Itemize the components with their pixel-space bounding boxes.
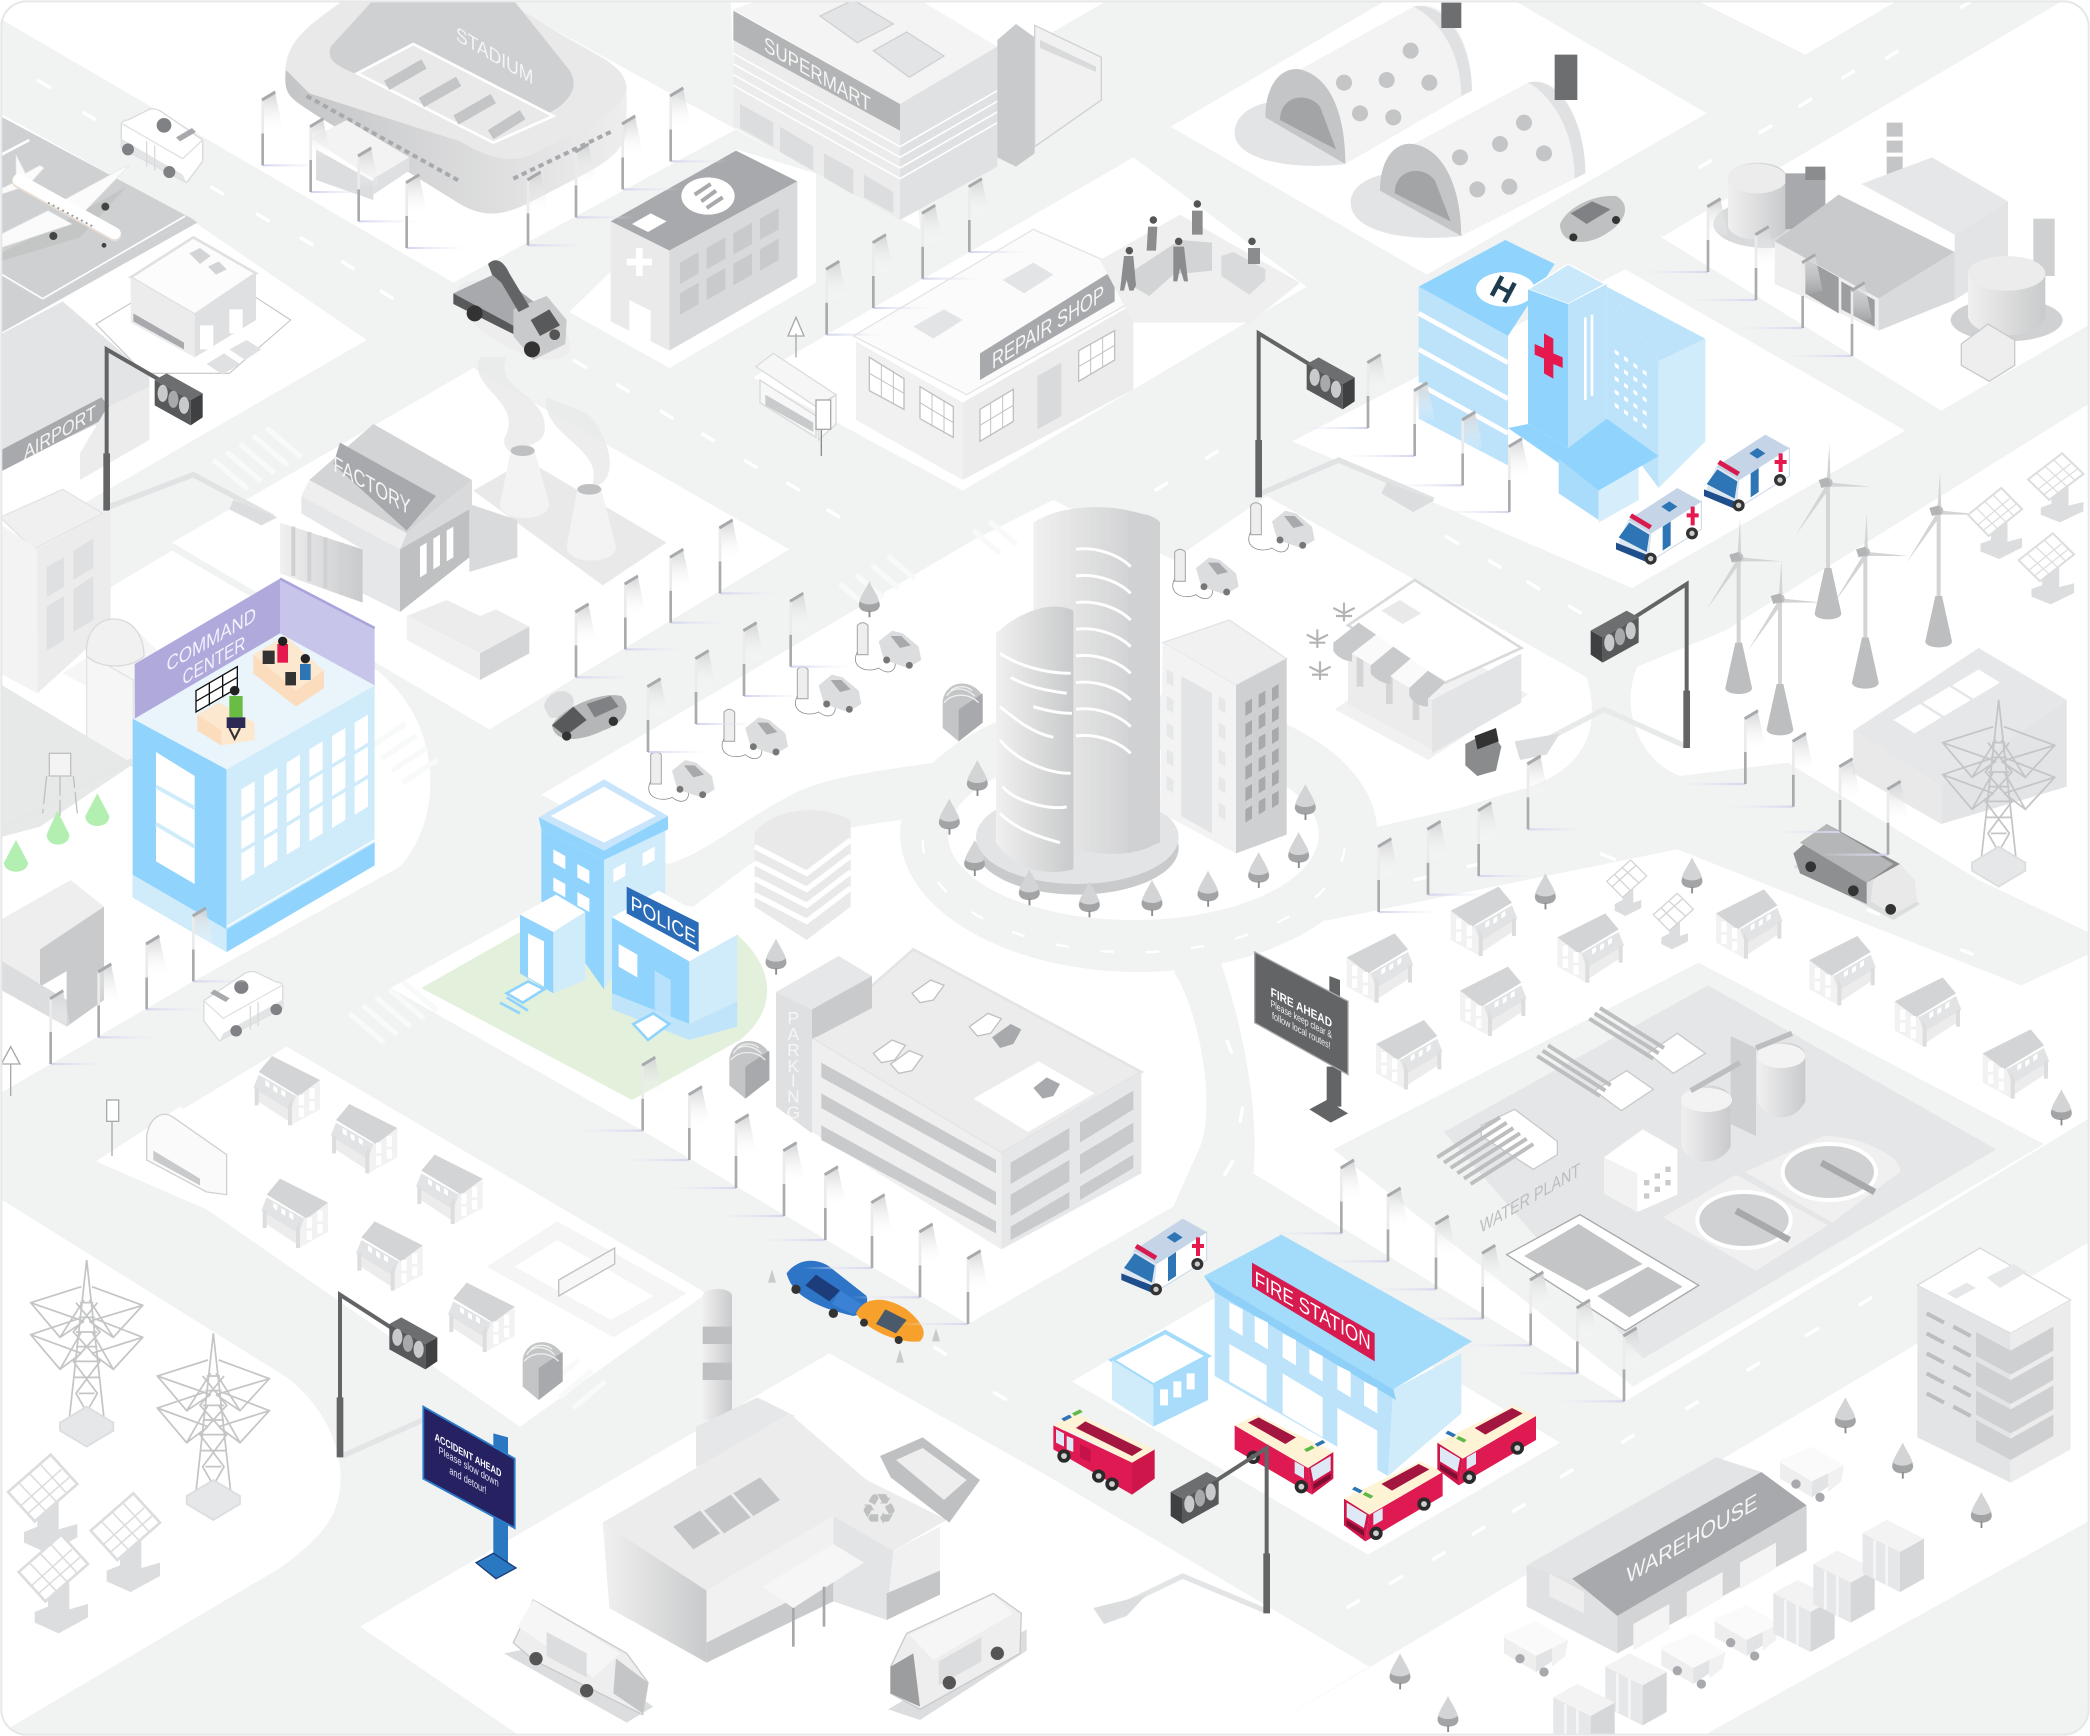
label: parking: G bbox=[787, 1103, 800, 1123]
power plant bbox=[1713, 123, 2063, 381]
helipad hospital bbox=[611, 151, 797, 351]
stacked round building bbox=[755, 810, 851, 940]
yard and watchtower bbox=[0, 684, 133, 837]
icon: recycle: ♻ bbox=[860, 1486, 898, 1534]
broken down car bbox=[544, 691, 627, 741]
houses west bbox=[253, 1056, 515, 1352]
trees east bbox=[1389, 857, 2072, 1732]
crane truck bbox=[445, 260, 582, 375]
label: stadium: STADIUM bbox=[456, 21, 533, 89]
bus stop north bbox=[756, 317, 836, 456]
label: command center: COMMAND bbox=[167, 602, 256, 677]
label: fire station: FIRE STATION bbox=[1255, 1266, 1371, 1355]
dumpster bbox=[1465, 728, 1501, 776]
label: parking: K bbox=[788, 1056, 800, 1076]
roundabout ring road bbox=[900, 695, 1377, 972]
central curved tower bbox=[976, 507, 1179, 895]
bus stop south bbox=[96, 1100, 283, 1209]
factory cooling towers bbox=[473, 357, 667, 585]
label: parking: R bbox=[787, 1040, 800, 1060]
fire ahead billboard: Please keep clear & bbox=[1271, 998, 1333, 1042]
ambulances bbox=[1121, 435, 1789, 1295]
lawn police bbox=[421, 880, 767, 1100]
airport terminal bbox=[0, 301, 149, 480]
traffic light southwest bbox=[340, 1295, 437, 1457]
airplane bbox=[0, 155, 129, 261]
drones bbox=[1307, 603, 1355, 680]
accident billboard bbox=[423, 1407, 516, 1579]
tennis court bbox=[487, 1221, 687, 1337]
recycling centre bbox=[603, 1289, 980, 1663]
fire station annex bbox=[1112, 1332, 1208, 1427]
label: parking: N bbox=[787, 1087, 800, 1107]
tall grey block southeast bbox=[1917, 1248, 2071, 1483]
wind turbines bbox=[1707, 444, 1981, 735]
label: airport: AIRPORT bbox=[24, 400, 96, 465]
parking garage bbox=[776, 949, 1141, 1249]
apartment tower beside central tower bbox=[1160, 620, 1287, 853]
label: parking: P bbox=[788, 1008, 799, 1028]
west office tower with dome bbox=[0, 489, 160, 767]
parked cars bbox=[873, 980, 1001, 1073]
street lamps bbox=[49, 87, 1908, 1402]
label: supermart: SUPERMART bbox=[764, 31, 871, 117]
crosswalks bbox=[213, 428, 1016, 1408]
airport runway bbox=[0, 116, 197, 333]
EV chargers bbox=[649, 503, 1315, 801]
L-shaped low building bbox=[407, 600, 529, 680]
pylons southwest bbox=[31, 1260, 269, 1520]
waste bins bbox=[523, 684, 983, 1400]
solar panels east bbox=[1968, 453, 2083, 604]
houses east bbox=[1347, 887, 2049, 1099]
cargo crates bbox=[1553, 1520, 1924, 1736]
greenhouse second bbox=[1351, 55, 1585, 238]
water plant bbox=[1333, 963, 2044, 1387]
accident billboard: Please slow down bbox=[439, 1445, 499, 1490]
stadium entrance bbox=[311, 120, 409, 200]
stadium bbox=[285, 0, 627, 214]
repair shop bbox=[853, 229, 1147, 480]
traffic light north bbox=[1259, 333, 1435, 512]
label: parking: A bbox=[788, 1024, 800, 1044]
fire trucks bbox=[1053, 1405, 1536, 1541]
garbage trucks south bbox=[504, 1593, 1027, 1723]
command center bbox=[133, 579, 375, 952]
blue hospital bbox=[1419, 240, 1705, 523]
warning sign bbox=[1, 1047, 20, 1096]
autonomous van south bbox=[204, 972, 283, 1041]
label: helipad H: H bbox=[1485, 268, 1522, 311]
small airport building with parking bbox=[96, 237, 291, 375]
label: water plant: WATER PLANT bbox=[1480, 1160, 1580, 1238]
repair workshop team bbox=[1100, 200, 1300, 323]
delivery trucks bbox=[1504, 1447, 1844, 1689]
fire ahead billboard: follow local routes! bbox=[1272, 1010, 1331, 1052]
taxi bbox=[1560, 196, 1625, 242]
accident billboard: and detour! bbox=[449, 1465, 487, 1497]
small solar bbox=[1607, 860, 1693, 949]
label: parking: I bbox=[791, 1071, 796, 1091]
autonomous van top left bbox=[121, 109, 203, 183]
warehouse bbox=[1527, 1457, 1807, 1653]
label: factory: FACTORY bbox=[333, 451, 411, 521]
traffic light east bbox=[1515, 584, 1687, 760]
traffic light south east bbox=[1093, 1448, 1267, 1624]
crash cars bbox=[768, 1261, 940, 1363]
fire ahead billboard bbox=[1255, 952, 1348, 1123]
command center: CENTER bbox=[183, 630, 245, 690]
label: accident ahead: ACCIDENT AHEAD bbox=[435, 1432, 501, 1480]
label: repair shop: REPAIR SHOP bbox=[992, 281, 1104, 375]
green trees bbox=[4, 793, 109, 872]
greenhouses bbox=[1235, 3, 1472, 166]
traffic light NW bbox=[107, 349, 277, 525]
solar panels southwest bbox=[8, 1455, 160, 1633]
fence bbox=[0, 760, 132, 829]
factory bbox=[280, 424, 517, 612]
police station bbox=[500, 779, 737, 1040]
utility building with pylon bbox=[1853, 648, 2067, 887]
label: fire ahead: FIRE AHEAD bbox=[1271, 985, 1332, 1031]
west L-building bbox=[0, 880, 104, 1027]
label: warehouse: WAREHOUSE bbox=[1627, 1489, 1757, 1590]
ring trees bbox=[765, 581, 1316, 975]
garbage truck east bbox=[1793, 824, 1920, 920]
label: police: POLICE bbox=[631, 891, 696, 950]
corner shop bbox=[1333, 580, 1528, 760]
supermart bbox=[733, 0, 1101, 220]
fire station bbox=[1204, 1235, 1472, 1476]
command center desks and staff bbox=[196, 636, 324, 745]
